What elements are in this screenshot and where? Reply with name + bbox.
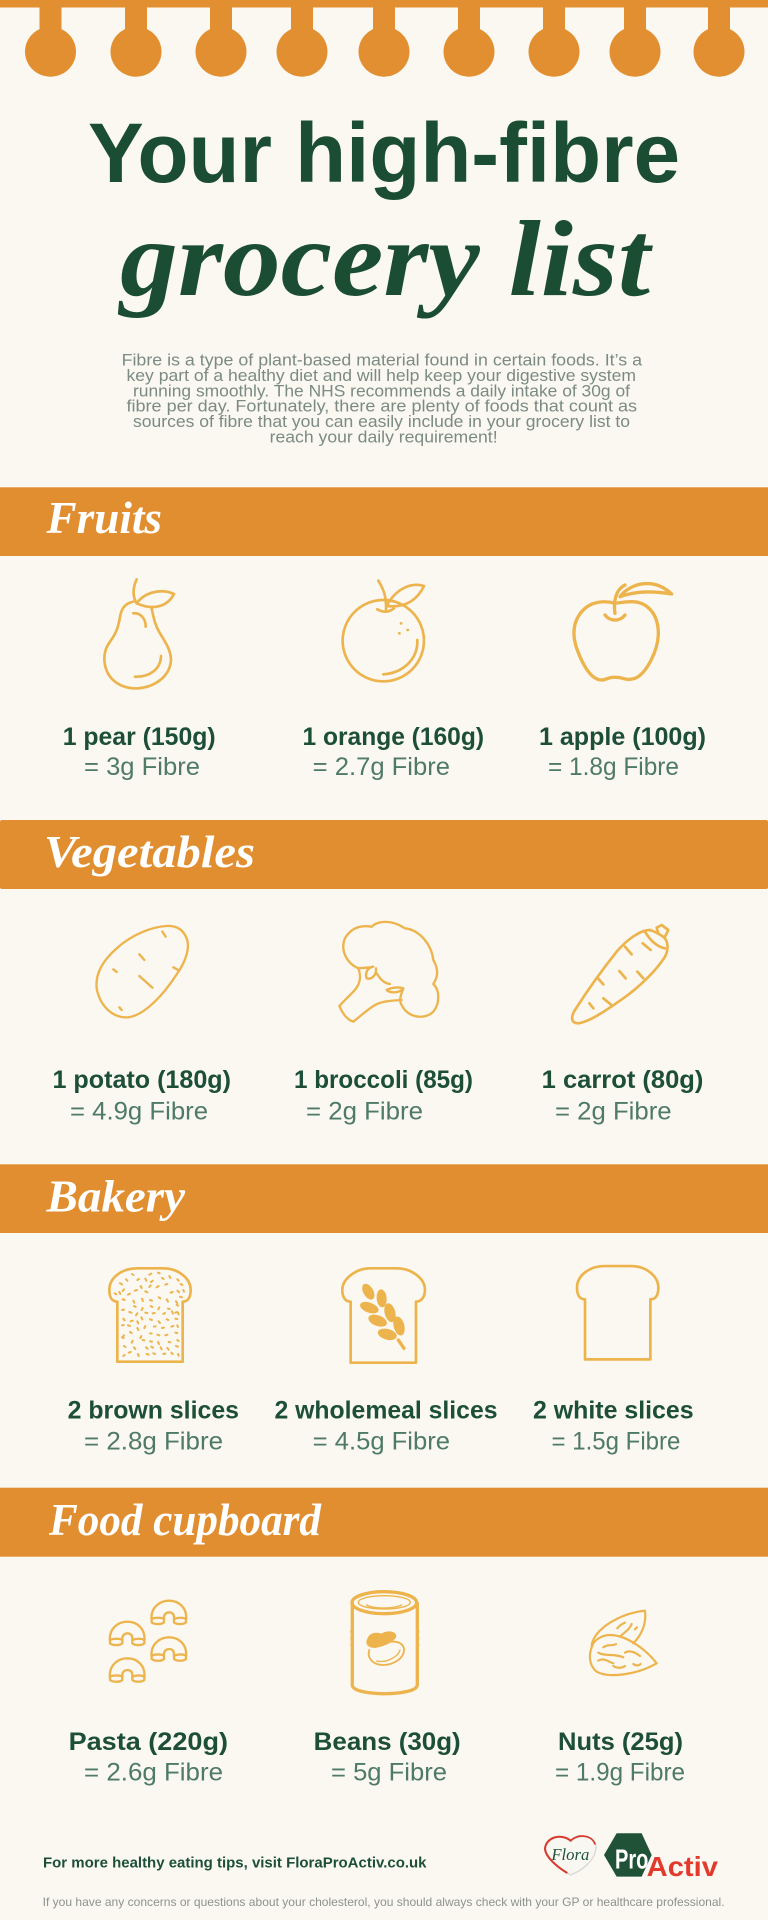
- title: Your high-fibre: [88, 106, 680, 200]
- item: brown slices: = 2.8g Fibre: [84, 1427, 223, 1455]
- panel: bakery: [0, 1164, 768, 1455]
- item: nuts: Nuts (25g): [558, 1728, 683, 1756]
- icon: apple: [574, 584, 672, 680]
- item: beans: Beans (30g): [314, 1728, 461, 1756]
- heading: bakery: Bakery: [45, 1171, 186, 1222]
- logo: Flora: Flora: [550, 1845, 589, 1864]
- icon: can of beans: [351, 1592, 419, 1694]
- item: orange: 1 orange (160g): [302, 723, 484, 751]
- icon: broccoli: [339, 922, 438, 1022]
- item: apple: = 1.8g Fibre: [548, 753, 679, 781]
- item: apple: [539, 723, 706, 781]
- item: pear: 1 pear (150g): [63, 723, 216, 751]
- icon: potato: [96, 926, 188, 1017]
- icon: pasta: [110, 1601, 186, 1682]
- item: broccoli: 1 broccoli (85g): [294, 1066, 473, 1094]
- item: brown slices: 2 brown slices: [68, 1396, 239, 1424]
- item: potato: 1 potato (180g): [52, 1066, 231, 1094]
- item: broccoli: = 2g Fibre: [306, 1097, 423, 1125]
- intro paragraph: [122, 352, 643, 446]
- intro paragraph: fibre per day. Fortunately, there are plenty of foods that count as: [126, 398, 637, 416]
- icon: white bread: [577, 1266, 658, 1359]
- item: pear: = 3g Fibre: [84, 753, 200, 781]
- heading: bakery: [0, 1164, 768, 1233]
- item: beans: [314, 1728, 461, 1787]
- item: carrot: [542, 1066, 703, 1125]
- item: white slices: = 1.5g Fibre: [552, 1427, 680, 1455]
- heading: fruits: Fruits: [46, 492, 162, 543]
- title: [88, 106, 680, 319]
- item: nuts: = 1.9g Fibre: [555, 1759, 685, 1787]
- intro paragraph: key part of a healthy diet and will help keep your digestive system: [126, 367, 636, 385]
- footer call to action: For more healthy eating tips, visit FloraProActiv.co.uk: [43, 1855, 427, 1872]
- heading: vegetables: [0, 820, 768, 889]
- intro paragraph: running smoothly. The NHS recommends a daily intake of 30g of: [133, 382, 630, 400]
- item: apple: 1 apple (100g): [539, 723, 706, 751]
- item: white slices: 2 white slices: [533, 1396, 694, 1424]
- item: orange: = 2.7g Fibre: [313, 753, 450, 781]
- logo: ProActiv: Activ: [647, 1851, 718, 1882]
- intro paragraph: Fibre is a type of plant-based material found in certain foods. It’s a: [122, 352, 643, 370]
- logo: Flora: [545, 1836, 596, 1875]
- item: white slices: [533, 1396, 694, 1455]
- item: carrot: = 2g Fibre: [555, 1097, 672, 1125]
- item: pasta: [69, 1728, 228, 1787]
- item: wholemeal slices: 2 wholemeal slices: [274, 1396, 498, 1424]
- item: potato: = 4.9g Fibre: [70, 1097, 208, 1125]
- heading: vegetables: Vegetables: [44, 826, 255, 877]
- heading: food cupboard: [0, 1488, 768, 1557]
- icon: carrot: [572, 925, 668, 1023]
- logo: ProActiv: [604, 1833, 718, 1882]
- heading: food cupboard: Food cupboard: [48, 1494, 322, 1545]
- item: wholemeal slices: = 4.5g Fibre: [313, 1427, 450, 1455]
- item: orange: [302, 723, 484, 781]
- item: nuts: [555, 1728, 685, 1787]
- icon: nuts: [590, 1611, 657, 1675]
- logo: ProActiv: Pro: [615, 1843, 648, 1874]
- icon: pear: [104, 579, 174, 688]
- item: carrot: 1 carrot (80g): [542, 1066, 703, 1094]
- heading: fruits: [0, 487, 768, 556]
- intro paragraph: sources of fibre that you can easily include in your grocery list to: [133, 413, 630, 431]
- title: grocery list: [118, 200, 653, 319]
- item: pasta: Pasta (220g): [69, 1728, 228, 1756]
- intro paragraph: reach your daily requirement!: [270, 428, 498, 446]
- item: pear: [63, 723, 216, 781]
- panel: food cupboard: [0, 1488, 768, 1787]
- panel: vegetables: [0, 820, 768, 1125]
- item: wholemeal slices: [274, 1396, 498, 1455]
- notepad binding strip: [0, 0, 768, 77]
- panel: fruits: [0, 487, 768, 781]
- item: brown slices: [68, 1396, 239, 1455]
- icon: orange: [343, 581, 424, 681]
- item: broccoli: [294, 1066, 473, 1125]
- icon: brown bread: [109, 1268, 191, 1362]
- item: potato: [52, 1066, 231, 1125]
- item: pasta: = 2.6g Fibre: [84, 1759, 223, 1787]
- icon: wholemeal bread with wheat: [342, 1268, 425, 1363]
- item: beans: = 5g Fibre: [331, 1759, 447, 1787]
- disclaimer: If you have any concerns or questions about your cholesterol, you should always check with your GP or healthcare professional.: [43, 1895, 725, 1909]
